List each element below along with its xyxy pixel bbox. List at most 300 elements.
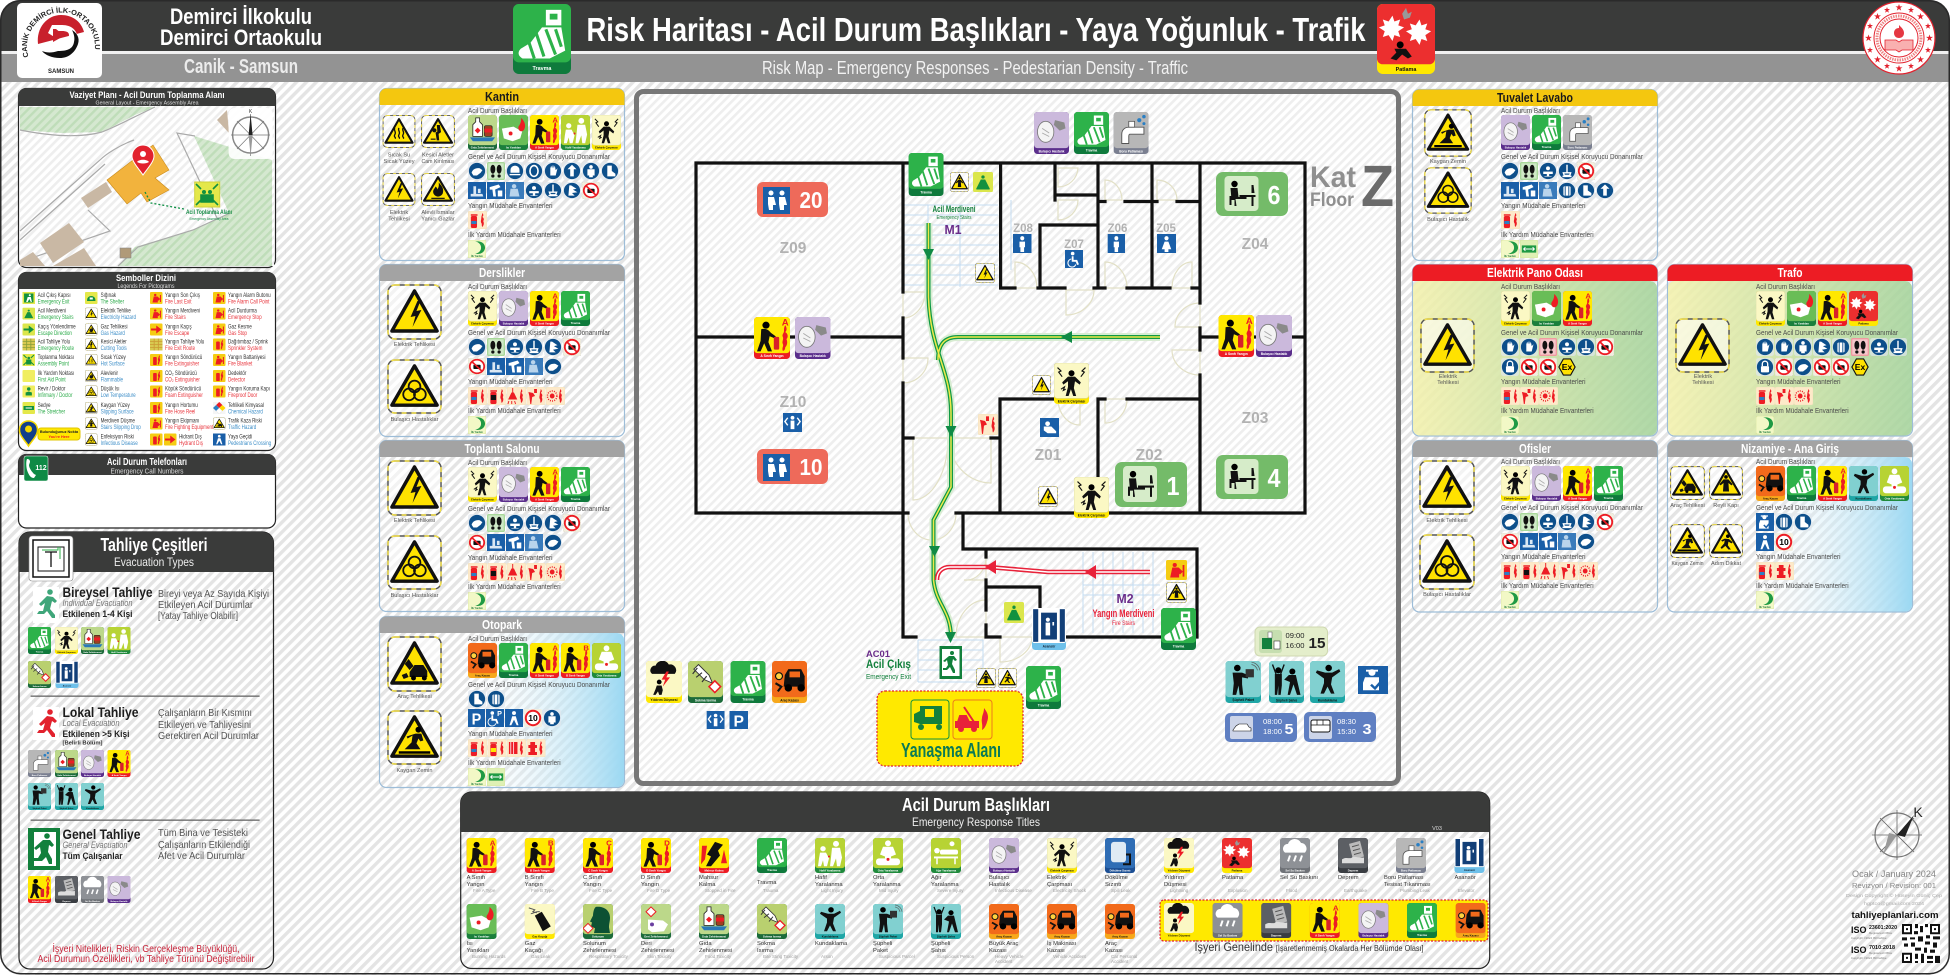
hazards	[1676, 319, 1729, 386]
legend column 2: Infectious Disease	[101, 440, 138, 447]
tile: Şüpheli Paket: Suspicious Parcel	[879, 954, 915, 959]
tile: Araç Kazası: Accident	[1111, 959, 1129, 964]
hazards: Elektrik	[1694, 374, 1712, 380]
general evacuation: Tüm Çalışanlar	[62, 851, 123, 862]
legend column 4: Yangın Koruma Kapı	[228, 386, 270, 393]
revision info	[1846, 869, 1943, 906]
PPE icons	[1756, 513, 1812, 551]
legend column 3: Fire Last Exit	[165, 299, 192, 306]
legend column 2: Electricity Hazard	[101, 314, 136, 321]
bus badge	[1304, 712, 1376, 742]
legend header: Semboller Dizini	[116, 273, 176, 283]
emergency route dotted	[145, 192, 184, 209]
first aid inventory	[1501, 416, 1519, 434]
tile: Patlama: Explosion	[1228, 888, 1248, 893]
legend column 2: Kaygan Yüzey	[101, 402, 130, 409]
elevator	[1004, 602, 1066, 650]
legend column 4: Yaya Geçidi	[228, 434, 252, 441]
tile: Hafif Yaralanma: Yaralanma	[815, 882, 843, 888]
PPE icons	[1756, 338, 1907, 376]
local evacuation: Gerektiren Acil Durumlar	[158, 730, 259, 742]
legend column 2: Elektrik Tehlike	[101, 308, 131, 315]
tile: Bulaşıcı Hastalık: Infectious Disease	[995, 888, 1032, 893]
restroom signs	[1013, 234, 1176, 268]
section labels: İlk Yardım Müdahale Envanterleri	[1756, 406, 1849, 415]
tile: Gaz Kaçağı	[525, 904, 555, 959]
legend column 2: Cutting Tools	[101, 345, 127, 352]
tile: Ağır Yaralanma	[931, 838, 964, 893]
heading: Nizamiye	[1668, 440, 1912, 457]
legend header	[18, 272, 276, 290]
legend column 4: Traffic Hazard	[228, 424, 256, 431]
panel: site plan	[18, 88, 276, 268]
hazards: Bulaşıcı Hastalık	[1427, 217, 1469, 223]
tile: Şüpheli Paket: Şüpheli	[873, 941, 892, 947]
tile: Mahsur Kalma: Mahsur	[699, 875, 718, 881]
section labels: Genel ve Acil Durum Kişisel Koruyucu Donanımlar	[468, 152, 610, 161]
hazards: Araç Tehlikesi	[397, 694, 432, 700]
section labels: İlk Yardım Müdahale Envanterleri	[1501, 406, 1594, 415]
general evacuation: Çalışanların Etkilendiği	[158, 839, 250, 851]
icon: header explosion	[1377, 4, 1435, 74]
individual evacuation: Individual Evacuation	[62, 598, 132, 608]
legend column 4	[213, 292, 271, 447]
section labels: Acil Durum Başlıkları	[1501, 106, 1560, 115]
legend column 1: First Aid Point	[38, 377, 66, 384]
first aid inventory	[1756, 416, 1774, 434]
section labels	[468, 106, 610, 239]
first aid inventory	[468, 240, 486, 258]
general evacuation	[28, 826, 250, 903]
hazards: Bulaşıcı Hastalıklar	[1423, 592, 1471, 598]
phones heading: Acil Durum Telefonları	[107, 456, 187, 468]
icon: first aid room	[1040, 418, 1059, 437]
you are here marker	[20, 421, 80, 446]
legend column 3: Yangın Tahliye Yolu	[165, 339, 204, 346]
panel: Kantin	[380, 88, 624, 260]
hazards: Yanıcı Gazlar	[421, 216, 455, 222]
panel: Tuvalet Lavabo	[1412, 90, 1658, 260]
tile: D Sınıfı Yangın: Yangın	[641, 882, 659, 888]
zone labels: Z01	[1035, 447, 1062, 464]
section labels: Acil Durum Başlıkları	[468, 634, 527, 643]
local evacuation: Lokal Tahliye	[62, 704, 139, 720]
legend column 3	[150, 292, 214, 447]
fire stairs M2: Fire Stairs	[1112, 621, 1135, 627]
tile: İş Makinası Kazası: Kazası	[1047, 948, 1065, 954]
tile: Ağır Yaralanma: Yaralanma	[931, 882, 959, 888]
panel: Toplantı Salonu	[380, 440, 624, 612]
tile: Solunum Zehirlenmesi: Solunum	[583, 941, 606, 947]
panel: Derslikler	[380, 264, 624, 436]
section labels: İlk Yardım Müdahale Envanterleri	[468, 230, 561, 239]
fire inventory	[1756, 562, 1794, 580]
section labels: Acil Durum Başlıkları	[468, 106, 527, 115]
first aid inventory	[1756, 591, 1774, 609]
legend column 4: Fireproof Door	[228, 392, 258, 399]
section labels: Acil Durum Başlıkları	[1756, 457, 1815, 466]
emergency icons	[1501, 291, 1592, 326]
panel: Ofisler	[1412, 440, 1658, 612]
legend column 4: Pedestrians Crossing	[228, 440, 271, 447]
right corridor icons	[1218, 315, 1292, 357]
tile: Boru Patlaması: Boru Patlaması	[1384, 875, 1424, 881]
map	[20, 106, 274, 266]
emergency icons	[1756, 291, 1878, 326]
section labels: Genel ve Acil Durum Kişisel Koruyucu Donanımlar	[1756, 328, 1898, 337]
floor heading	[1310, 154, 1394, 219]
section labels: Acil Durum Başlıkları	[1501, 457, 1560, 466]
hazards	[383, 116, 455, 222]
legend column 4: Yangın Battaniyesi	[228, 354, 266, 361]
section labels: Yangın Müdahale Envanterleri	[468, 729, 553, 738]
staff shift badge: 16:00	[1286, 641, 1304, 650]
staff shift badge: 15	[1308, 635, 1326, 652]
heading: Toplantı Salonu	[380, 440, 624, 457]
PPE icons	[1501, 513, 1614, 550]
hazards: Elektrik	[390, 210, 408, 216]
stairs M1 label: M1	[944, 222, 962, 237]
zone labels: Z05	[1156, 223, 1177, 235]
panel: Trafo	[1668, 264, 1912, 436]
heading: Elektrik Pano Odası	[1412, 264, 1658, 281]
ISO marks: Copyright ©2024 ISO tahliye	[1851, 936, 1887, 940]
badge: 6 desks	[1216, 172, 1288, 216]
tile: Solunum Zehirlenmesi: Respiratory Toxicity	[589, 954, 629, 959]
legend header: Legends For Pictograms	[118, 284, 174, 290]
legend column 2	[85, 292, 141, 447]
hazards: Elektrik Tehlikesi	[394, 518, 435, 524]
revision info: hgptco@gmail.com 2024	[1864, 901, 1925, 906]
stairs M1 label: Emergency Stairs	[936, 215, 972, 221]
tile: İş Makinası Kazası	[1047, 904, 1087, 959]
heading: Tuvalet Lavabo	[1412, 90, 1658, 106]
docking area: Yanaşma Alanı	[901, 740, 1001, 762]
legend column 2: Enfeksiyon Riski	[101, 434, 134, 441]
tile: Gıda Zehirlenmesi: Gıda	[699, 941, 712, 947]
tile: İş Makinası Kazası: Vehicle Accident	[1053, 954, 1087, 959]
ISO marks: Copyright ©2024 ISO tahliye	[1851, 956, 1887, 960]
heading	[902, 795, 1442, 832]
tile: Kundaklama	[815, 904, 848, 959]
top risk icons	[1034, 112, 1149, 154]
legend column 2: Düşük Isı	[101, 386, 120, 393]
hazards: Bulaşıcı Hastalıklar	[391, 417, 439, 423]
tile: Araç Kazası: Car Personal	[1111, 954, 1137, 959]
section labels: İlk Yardım Müdahale Envanterleri	[468, 582, 561, 591]
tile: Dökülme Sızıntı	[1105, 838, 1135, 893]
legend column 3: Yangın Söndürücü	[165, 354, 202, 361]
tile: Şüpheli Paket: Paket	[873, 948, 888, 954]
school logo: SAMSUN	[48, 69, 74, 75]
legend column 2: Gas Hazard	[101, 330, 125, 337]
stairs M1 label	[932, 204, 976, 237]
hazards	[1421, 319, 1474, 386]
hazards: Kaygan Zemin	[396, 768, 433, 774]
tile: Patlama: Patlama	[1222, 875, 1244, 881]
compass: K	[1913, 804, 1923, 820]
first aid inventory	[1501, 591, 1519, 609]
workplace-wide strip	[1160, 900, 1488, 941]
evacuation route: red	[937, 560, 1150, 580]
workplace-wide caption: İşyeri Genelinde [İşaretlenmemiş Okalarda Her Bölümde Olası]	[1194, 940, 1424, 954]
tile: Yıldırım Düşmesi: Düşmesi	[1164, 882, 1187, 888]
revision info: Ocak / January 2024	[1852, 869, 1936, 879]
tile: D Sınıfı Yangın	[641, 838, 671, 893]
icon: individual	[33, 587, 59, 623]
tile: Gıda Zehirlenmesi: Food Toxicity	[705, 954, 732, 959]
section labels: Yangın Müdahale Envanterleri	[1501, 552, 1586, 561]
hazards: Elektrik Tehlikesi	[1426, 518, 1468, 524]
tile: Travma: Travma	[757, 880, 777, 886]
tile: Orta Yaralanma: Orta	[873, 875, 885, 881]
fire stairs M2	[1092, 560, 1196, 650]
tile: Büyük Araç Kazası: Büyük Araç	[989, 941, 1018, 947]
local evacuation	[28, 704, 259, 810]
emergency icons	[1756, 466, 1909, 501]
PPE icons	[468, 690, 561, 728]
general evacuation: General Evacuation	[62, 840, 128, 850]
hazards	[1425, 110, 1471, 223]
tile: Kundaklama: Kundaklama	[815, 941, 848, 947]
hazards	[1420, 461, 1474, 598]
taxi badge	[1225, 713, 1297, 742]
hazards: Tehlikesi	[1692, 380, 1714, 386]
tile: Asansör: Elevator	[1458, 888, 1475, 893]
assembly point icon	[195, 182, 220, 207]
panel: Nizamiye - Ana Giriş	[1668, 440, 1912, 612]
tile: Hafif Yaralanma: Hafif	[815, 875, 827, 881]
tile: Araç Kazası: Araç	[1105, 941, 1117, 947]
electric shock top	[1032, 363, 1089, 404]
tile: Kundaklama: Arson	[821, 954, 833, 959]
legend column 4: Fire Blanket	[228, 361, 253, 368]
panel: evacuation types	[19, 532, 274, 969]
bus badge: 08:30	[1337, 717, 1356, 726]
zone labels: Z10	[780, 394, 806, 411]
school logo: CANİK DEMİRCİ İLK-ORTAOKULU	[22, 6, 100, 58]
icon: fire truck	[953, 700, 992, 739]
footer: compass and credits	[1846, 804, 1943, 963]
section labels: Yangın Müdahale Envanterleri	[468, 201, 553, 210]
heading: Trafo	[1668, 264, 1912, 281]
first aid inventory	[468, 768, 505, 786]
tile: Travma	[757, 838, 787, 893]
tile: Gıda Zehirlenmesi	[699, 904, 732, 959]
individual evacuation: Etkileyen Acil Durumlar	[158, 599, 253, 611]
fire inventory	[468, 563, 565, 581]
tile: Elektrik Çarpması: Çarpması	[1047, 882, 1073, 888]
tile: Gaz Kaçağı: Gas Leak	[531, 954, 551, 959]
emergency icons	[1501, 115, 1592, 150]
icon: emergency stop	[978, 414, 998, 435]
section labels: Genel ve Acil Durum Kişisel Koruyucu Donanımlar	[468, 680, 610, 689]
tile: Isı Yanıkları: Isı	[467, 941, 473, 947]
general evacuation: Genel Tahliye	[62, 826, 141, 842]
tile: Şüpheli Paket	[873, 904, 915, 959]
taxi badge: 18:00	[1263, 727, 1282, 736]
PPE icons	[1501, 338, 1614, 376]
legend column 3: Köpük Söndürücü	[165, 386, 201, 393]
tile: Boru Patlaması	[1384, 838, 1431, 893]
hazards: Sıcak Yüzey	[384, 159, 415, 165]
legend column 1: Acil Çıkış Kapısı	[38, 292, 71, 299]
emergency exit AC01: Emergency Exit	[866, 672, 912, 681]
section labels: Yangın Müdahale Envanterleri	[468, 377, 553, 386]
legend column 4: Acil Durdurma	[228, 308, 257, 315]
panel: emergency phones	[18, 454, 276, 528]
tile: A Sınıfı Yangın: A Sınıfı	[467, 875, 486, 881]
section labels: Genel ve Acil Durum Kişisel Koruyucu Donanımlar	[1501, 152, 1643, 161]
legend column 2: Hot Surface	[101, 361, 125, 368]
tile: Şüpheli Şahıs	[931, 904, 975, 959]
compass: K	[249, 109, 253, 115]
hazards	[388, 637, 441, 774]
tile: Büyük Araç Kazası: Kazası	[989, 948, 1007, 954]
zone labels: Z03	[1242, 410, 1269, 427]
icon: 112 phone	[24, 456, 48, 481]
tile: Patlama	[1222, 838, 1252, 893]
floor heading: Kat	[1310, 161, 1356, 194]
legend column 4: Gas Stop	[228, 330, 247, 337]
taxi badge: 08:00	[1263, 717, 1282, 726]
legend column 2: Slipping Surface	[101, 409, 134, 416]
evacuation note: İşyeri Nitelikleri, Riskin Gerçekleşme Büyüklüğü,	[52, 942, 240, 955]
section labels: İlk Yardım Müdahale Envanterleri	[468, 406, 561, 415]
legend column 3: Hidrant Dış	[179, 434, 202, 441]
first aid inventory	[468, 416, 486, 434]
emergency icons	[468, 115, 621, 150]
tile: Travma: Trauma	[763, 888, 779, 893]
heading: Derslikler	[380, 264, 624, 281]
local evacuation: Local Evacuation	[62, 718, 120, 728]
left corridor icons	[754, 317, 830, 359]
legend column 2: Low Temperature	[101, 392, 136, 399]
heading: V03	[1432, 826, 1442, 832]
bus badge: 3	[1362, 721, 1372, 738]
legend column 4: Trafik Kaza Riski	[228, 418, 262, 425]
evacuation note	[38, 942, 255, 965]
hazards	[1670, 467, 1742, 567]
section labels	[468, 282, 610, 415]
you are here marker: You're Here	[49, 435, 69, 439]
badge: 20 seats	[757, 182, 828, 217]
zone labels: Z09	[780, 240, 807, 257]
hazards: Bulaşıcı Hastalıklar	[391, 593, 439, 599]
local evacuation: [Belirli Bölüm]	[62, 740, 103, 746]
badge: 1 desk	[1115, 462, 1187, 507]
badge: 20 seats: 20	[800, 187, 822, 213]
section labels: Acil Durum Başlıkları	[468, 458, 527, 467]
legend column 1: Revir / Doktor	[38, 386, 66, 393]
legend column 4: Gaz Kesme	[228, 324, 252, 331]
legend column 4: Dağıtımbaz / Sprink	[228, 339, 268, 346]
tile: Deprem: Earthquake	[1344, 888, 1368, 893]
general evacuation: Tüm Bina ve Tesisteki	[158, 827, 248, 839]
tile: Isı Yanıkları: Yanıkları	[467, 948, 489, 954]
emergency icons	[1501, 466, 1623, 501]
hazards: Kaygan Zemin	[1672, 561, 1704, 567]
icon: room Z10 sign	[783, 413, 802, 432]
school names: Canik - Samsun	[184, 56, 298, 78]
you are here marker: Bulunduğunuz Nokta	[40, 430, 79, 434]
assembly label	[186, 210, 232, 221]
tile: Yıldırım Düşmesi	[1164, 838, 1194, 893]
stairs M1 icons	[909, 153, 995, 283]
phones heading	[107, 456, 187, 476]
emergency icons	[468, 643, 621, 678]
tile: Orta Yaralanma	[873, 838, 903, 893]
legend column 1: Kaçış Yönlendirme	[38, 324, 76, 331]
hazards: Tehlikesi	[388, 216, 410, 222]
tile: Elektrik Çarpması	[1047, 838, 1087, 893]
fire inventory	[1501, 562, 1598, 580]
legend column 3: Hydrant Dış	[179, 440, 203, 447]
tile: Deprem	[1338, 838, 1368, 893]
hazards: Tehlikesi	[1437, 380, 1459, 386]
section labels: Genel ve Acil Durum Kişisel Koruyucu Donanımlar	[1501, 328, 1643, 337]
school names: Demirci İlkokulu	[170, 4, 312, 29]
docking area	[877, 691, 1023, 766]
legend column 3: Yangın Merdiveni	[165, 308, 200, 315]
legend column 3: CO₂ Söndürücü	[165, 370, 197, 377]
PPE icons	[468, 338, 581, 375]
legend column 4: Detector	[228, 377, 245, 384]
legend column 2: Sıcak Yüzey	[101, 354, 126, 361]
tile: Elektrik Çarpması: Elektrik	[1047, 875, 1066, 881]
tile: Gıda Zehirlenmesi: Zehirlenmesi	[699, 948, 732, 954]
tile: Solunum Zehirlenmesi	[583, 904, 629, 959]
fire inventory	[1501, 387, 1558, 405]
heading: Toplantı Salonu: Toplantı Salonu	[464, 441, 540, 456]
legend column 2: Stairs Slipping Drop	[101, 424, 141, 431]
local evacuation: Etkileyen ve Tahliyesini	[158, 719, 251, 731]
heading: Tuvalet Lavabo: Tuvalet Lavabo	[1497, 90, 1573, 105]
evacuation heading	[100, 535, 208, 569]
hazards: Araç Tehlikesi	[1670, 503, 1705, 509]
legend column 3: Fire Exit Route	[165, 345, 195, 352]
individual evacuation: [Yatay Tahliye Olabilir]	[158, 610, 238, 622]
tile: Sel Su Baskını: Flood	[1286, 888, 1298, 893]
legend column 1: The Stretcher	[38, 409, 65, 416]
panel: emergency response titles	[461, 792, 1490, 968]
individual evacuation: Etkilenen 1-4 Kişi	[62, 609, 132, 620]
badge: 4 desks: 4	[1268, 463, 1281, 493]
legend column 2: Sığınak	[101, 292, 116, 299]
fire inventory	[468, 739, 546, 757]
tile: Sokma Isırma: Sokma	[757, 941, 776, 947]
legend column 3: CO₂ Extinguisher	[165, 377, 200, 384]
fire inventory	[468, 211, 487, 229]
heading: Ofisler: Ofisler	[1519, 441, 1551, 456]
floor heading: Floor	[1310, 190, 1355, 211]
legend column 3: Foam Extinguisher	[165, 392, 203, 399]
assembly label: Emergency Assembly Area	[190, 216, 229, 221]
compass	[229, 108, 273, 159]
legend column 4: Tehlikeli Kimyasal	[228, 402, 264, 409]
legend column 3: Yangın Hortumu	[165, 402, 198, 409]
legend column 3: Yangın Kaçış	[165, 324, 192, 331]
legend column 1: Escape Direction	[38, 330, 72, 337]
individual evacuation: Bireysel Tahliye	[62, 584, 153, 600]
phones heading: Emergency Call Numbers	[110, 466, 184, 476]
tile: D Sınıfı Yangın: Fire D Type	[647, 888, 671, 893]
tile: Mahsur Kalma	[699, 838, 736, 893]
taxi badge: 5	[1284, 721, 1294, 738]
tile: Gaz Kaçağı: Gaz	[525, 941, 536, 947]
heading: Kantin: Kantin	[485, 89, 519, 104]
floor heading: Z	[1361, 154, 1394, 219]
